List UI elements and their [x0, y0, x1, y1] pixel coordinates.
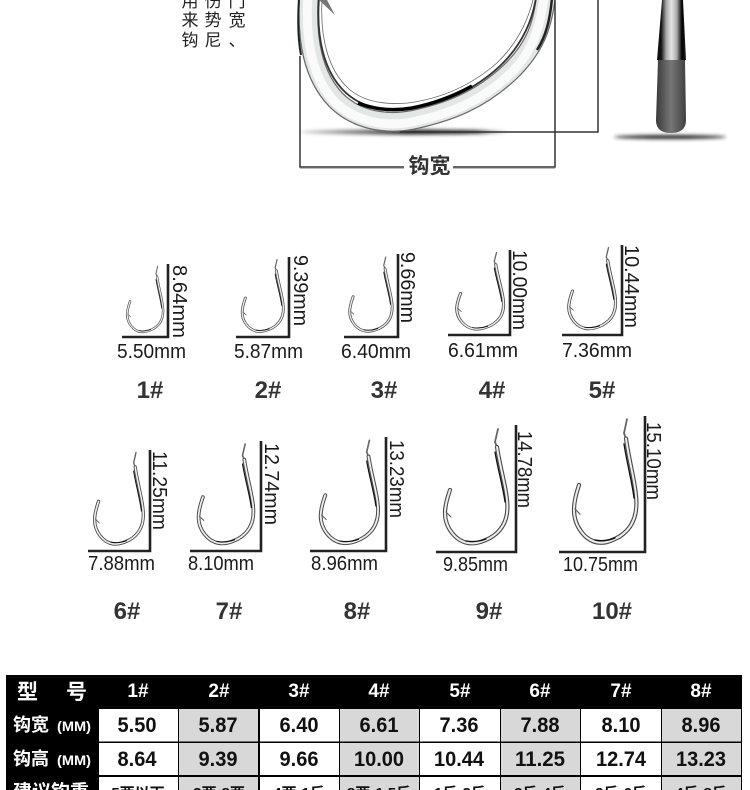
side shadow: [614, 135, 726, 139]
hook size 10: [559, 416, 664, 625]
height label: 10.44mm: [620, 245, 642, 328]
side view of hook: [614, 0, 726, 139]
height label: 9.39mm: [289, 255, 311, 326]
row: hook height: 钩高: [13, 748, 49, 769]
width label: 5.87mm: [234, 341, 303, 363]
large hook detail diagram: [298, 0, 598, 178]
row: hook width: 5.87: [198, 714, 238, 737]
width label: 6.61mm: [448, 340, 518, 362]
hook drawing: [350, 257, 392, 331]
header row: 8#: [690, 681, 712, 702]
row: hook width: 钩宽: [13, 714, 49, 735]
size number: 7#: [216, 598, 242, 625]
width label: 8.96mm: [311, 553, 378, 575]
vertical text fragment: 、: [228, 31, 246, 50]
hook drawing: [127, 266, 163, 332]
header row: 号: [66, 681, 87, 704]
height label: 11.25mm: [148, 451, 170, 530]
row: hook height: 11.25: [515, 748, 565, 771]
height label: 13.23mm: [385, 440, 407, 518]
axes: [190, 441, 261, 551]
row: hook width: (MM): [57, 718, 91, 734]
width label: 9.85mm: [443, 554, 508, 576]
row: hook height: 9.66: [280, 748, 318, 771]
hook size 1: [117, 264, 190, 404]
hook drawing: [574, 419, 636, 543]
row: hook width: 7.36: [440, 714, 478, 737]
hook drawing: [445, 429, 507, 543]
hook size 6: [88, 450, 170, 625]
height label: 10.00mm: [508, 250, 530, 330]
row: hook height: 13.23: [676, 748, 726, 771]
dimension lines: [300, 0, 598, 167]
size number: 8#: [344, 598, 370, 625]
label: hook width: 钩宽: [408, 154, 450, 178]
row: hook width: 6.40: [280, 714, 318, 737]
row: hook height: 9.39: [198, 748, 238, 771]
width label: 6.40mm: [341, 341, 411, 363]
axes: [310, 437, 386, 551]
hook barb: [319, 0, 335, 15]
width label: 8.10mm: [188, 553, 254, 575]
size number: 3#: [371, 377, 397, 404]
hook size 2: [234, 255, 311, 404]
row: hook width: [13, 714, 720, 737]
header row: 1#: [127, 681, 149, 702]
side upper shank: [657, 0, 686, 60]
header row: 6#: [529, 681, 551, 702]
vertical text fragment: 钩: [182, 31, 198, 50]
specification table: [6, 675, 742, 790]
row: hook height: (MM): [57, 752, 91, 768]
row: hook height: 8.64: [118, 748, 157, 771]
hook drawing: [199, 444, 253, 543]
header row: 3#: [288, 681, 310, 702]
hook size 8: [310, 437, 407, 625]
header row: 5#: [449, 681, 471, 702]
width label: 10.75mm: [563, 554, 638, 576]
row: hook height: 12.74: [596, 748, 646, 771]
hook size 3: [341, 252, 418, 404]
hook drawing: [95, 453, 143, 544]
vertical text fragment: 来: [182, 11, 198, 30]
large hook body: [298, 0, 552, 124]
vertical text fragment: 宽: [228, 11, 246, 30]
axes: [562, 245, 622, 335]
row: hook width: 8.10: [602, 714, 640, 737]
size number: 4#: [479, 377, 505, 404]
hook drawing: [569, 248, 616, 329]
size number: 6#: [114, 598, 140, 625]
axes: [344, 254, 398, 337]
hook size 7: [188, 441, 282, 625]
axes: [559, 416, 645, 552]
size number: 2#: [255, 377, 281, 404]
size number: 1#: [137, 377, 163, 404]
axes: [236, 257, 289, 337]
row: hook width: 7.88: [520, 714, 560, 737]
header row: 4#: [368, 681, 390, 702]
axes: [436, 425, 516, 552]
header row: 2#: [208, 681, 230, 702]
row: hook height: 10.00: [354, 748, 404, 771]
grey cells and white cells: [99, 709, 741, 790]
table background: [6, 675, 742, 790]
hook shadow: [301, 130, 509, 134]
row: hook height: 10.44: [434, 748, 484, 771]
side lower shank: [656, 60, 686, 133]
hook size 4: [448, 250, 530, 404]
vertical text fragment: [182, 0, 246, 50]
row: hook height: [13, 748, 726, 771]
height label: 9.66mm: [396, 252, 418, 323]
width label: 7.88mm: [88, 553, 155, 575]
height label: 14.78mm: [513, 431, 535, 508]
hook drawing: [242, 260, 283, 332]
width label: 5.50mm: [117, 341, 186, 363]
row: hook width: 6.61: [360, 714, 399, 737]
vertical text fragment: 尼: [204, 31, 222, 50]
axes: [122, 264, 168, 337]
axes: [448, 250, 510, 335]
size number: 5#: [589, 377, 615, 404]
row: hook width: 8.96: [682, 714, 720, 737]
size number: 9#: [476, 598, 502, 625]
row: suggested fish weight: [13, 781, 727, 790]
size number: 10#: [592, 598, 632, 625]
hook size 9: [436, 425, 535, 625]
header row: 7#: [610, 681, 632, 702]
width label: 7.36mm: [562, 340, 632, 362]
hook drawing: [457, 253, 504, 329]
hook size 5: [562, 245, 642, 404]
header row: [17, 681, 712, 704]
row: hook width: 5.50: [118, 714, 156, 737]
height label: 12.74mm: [260, 443, 282, 525]
height label: 8.64mm: [168, 265, 190, 338]
axes: [88, 450, 150, 551]
hook drawing: [321, 440, 378, 543]
header row: 型: [17, 681, 38, 704]
height label: 15.10mm: [642, 422, 664, 500]
vertical text fragment: 势: [204, 11, 222, 30]
